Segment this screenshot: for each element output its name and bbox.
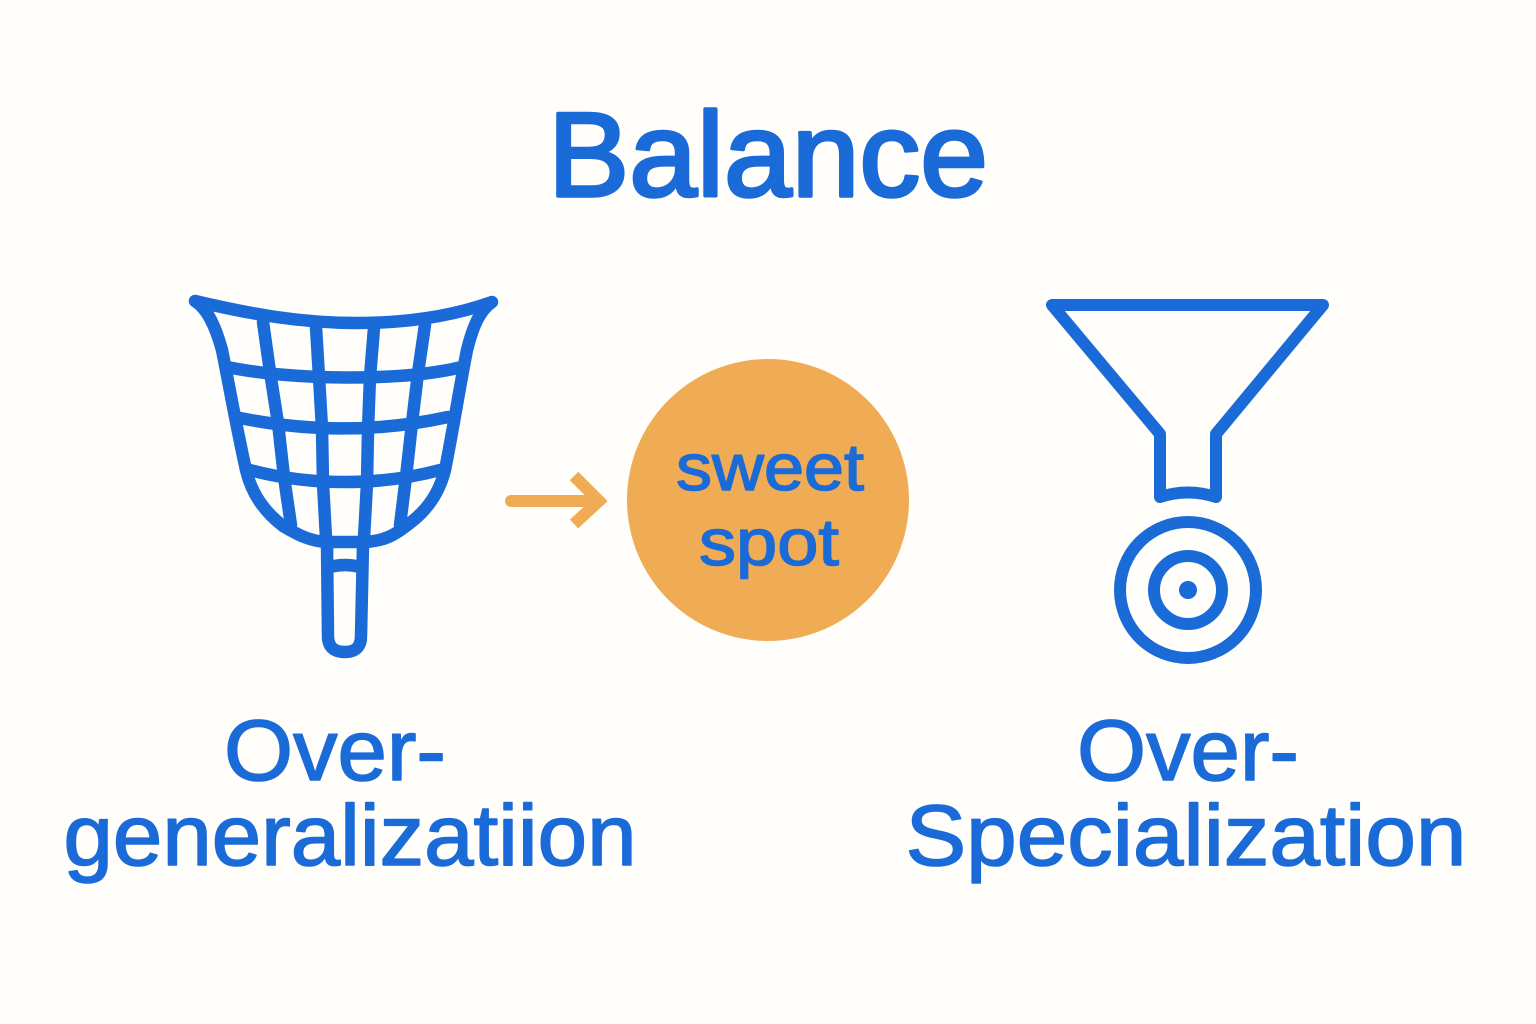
net outline [195,301,492,542]
sweet spot circle [627,359,909,641]
icon: net [195,301,492,652]
icon: funnel and target [1052,305,1323,658]
label: over-specialization: Over- [1077,703,1299,799]
net horizontal strands [227,367,462,378]
label: over-generalization: Over- [224,703,446,799]
title: Balance [548,88,988,222]
net vertical strands [263,322,291,525]
sweet spot circle: sweet [676,430,864,504]
arrow [511,476,599,524]
net handle [327,545,363,652]
label: over-generalization [64,703,636,884]
label: over-specialization [906,703,1466,884]
sweet spot circle: spot [699,505,839,579]
label: over-specialization: Specialization [906,788,1466,884]
label: over-generalization: generalizatiion [64,788,636,884]
